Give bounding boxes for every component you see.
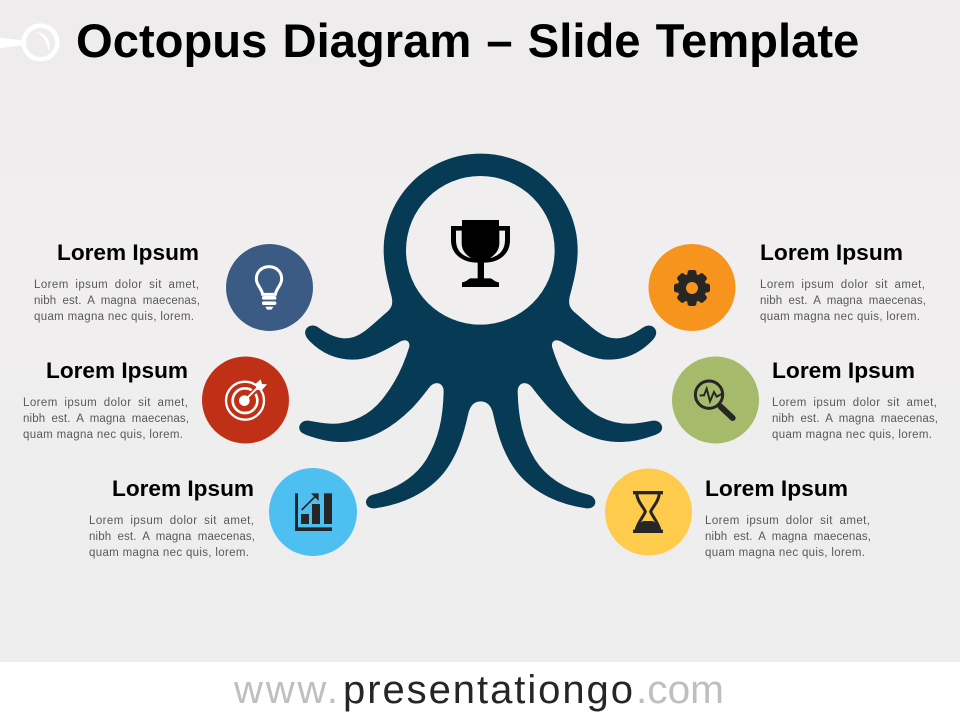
body text: quam magna nec quis, lorem. xyxy=(34,311,194,323)
body text: quam magna nec quis, lorem. xyxy=(760,311,920,323)
heading: Lorem Ipsum xyxy=(112,476,254,501)
heading: Lorem Ipsum xyxy=(705,476,848,501)
title: Octopus Diagram – Slide Template xyxy=(76,15,859,68)
body text: nibh est. A magna maecenas, xyxy=(760,295,926,307)
footer: website url: www. xyxy=(233,668,338,712)
footer: website url: presentationgo xyxy=(343,668,633,712)
body text: nibh est. A magna maecenas, xyxy=(23,413,189,425)
body text xyxy=(34,279,200,323)
panel: item top left xyxy=(34,240,313,331)
heading: Lorem Ipsum xyxy=(57,240,199,265)
body text: Lorem ipsum dolor sit amet, xyxy=(23,397,188,409)
icon: light bulb xyxy=(226,244,313,331)
body text: quam magna nec quis, lorem. xyxy=(23,429,183,441)
body text xyxy=(772,397,938,441)
body text: Lorem ipsum dolor sit amet, xyxy=(760,279,925,291)
body text: quam magna nec quis, lorem. xyxy=(772,429,932,441)
body text: Lorem ipsum dolor sit amet, xyxy=(89,515,254,527)
icon: target xyxy=(202,356,289,444)
body text: nibh est. A magna maecenas, xyxy=(89,531,255,543)
panel: item bottom left xyxy=(89,468,357,559)
body text xyxy=(760,279,926,323)
octopus body xyxy=(300,154,662,508)
icon: magnifier xyxy=(672,356,759,444)
body text: nibh est. A magna maecenas, xyxy=(772,413,938,425)
body text: Lorem ipsum dolor sit amet, xyxy=(772,397,937,409)
panel: item middle right xyxy=(672,356,938,444)
body text: nibh est. A magna maecenas, xyxy=(705,531,871,543)
body text xyxy=(23,397,189,441)
icon: trophy xyxy=(451,220,510,287)
icon: gear xyxy=(648,244,736,331)
body text: quam magna nec quis, lorem. xyxy=(89,547,249,559)
body text: Lorem ipsum dolor sit amet, xyxy=(34,279,199,291)
panel: item bottom right xyxy=(605,468,871,559)
panel: item top right xyxy=(648,240,926,331)
body text: quam magna nec quis, lorem. xyxy=(705,547,865,559)
body text: nibh est. A magna maecenas, xyxy=(34,295,200,307)
footer: website url: .com xyxy=(636,668,724,712)
heading: Lorem Ipsum xyxy=(46,358,188,383)
footer: website url xyxy=(0,662,960,720)
icon: hourglass xyxy=(605,468,692,556)
heading: Lorem Ipsum xyxy=(760,240,903,265)
icon: bar chart xyxy=(269,468,357,556)
body text xyxy=(89,515,255,559)
body text: Lorem ipsum dolor sit amet, xyxy=(705,515,870,527)
panel: item middle left xyxy=(23,356,289,444)
body text xyxy=(705,515,871,559)
heading: Lorem Ipsum xyxy=(772,358,915,383)
logo: ring with pointer xyxy=(0,26,57,59)
